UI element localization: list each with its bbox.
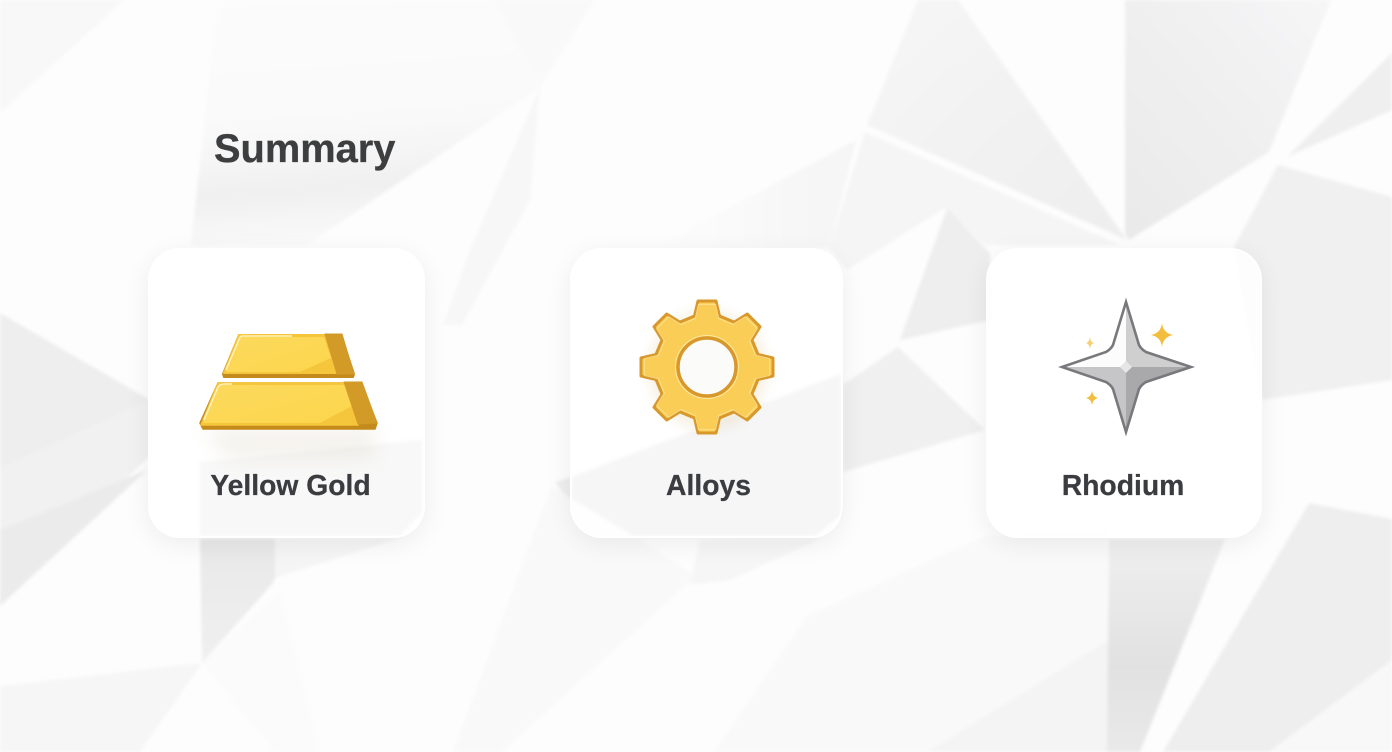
label: alloys: Alloys: [666, 469, 751, 501]
icon: gold bars: [199, 334, 378, 460]
panel: alloys: [570, 248, 843, 538]
title: Summary: [214, 127, 395, 171]
label: yellow gold: Yellow Gold: [210, 469, 371, 501]
icon: four-point star with sparkles: [1058, 298, 1195, 436]
icon: gear: [640, 300, 774, 434]
label: rhodium: Rhodium: [1062, 469, 1184, 501]
panel: rhodium: [986, 248, 1262, 538]
panel: yellow gold: [148, 248, 425, 538]
